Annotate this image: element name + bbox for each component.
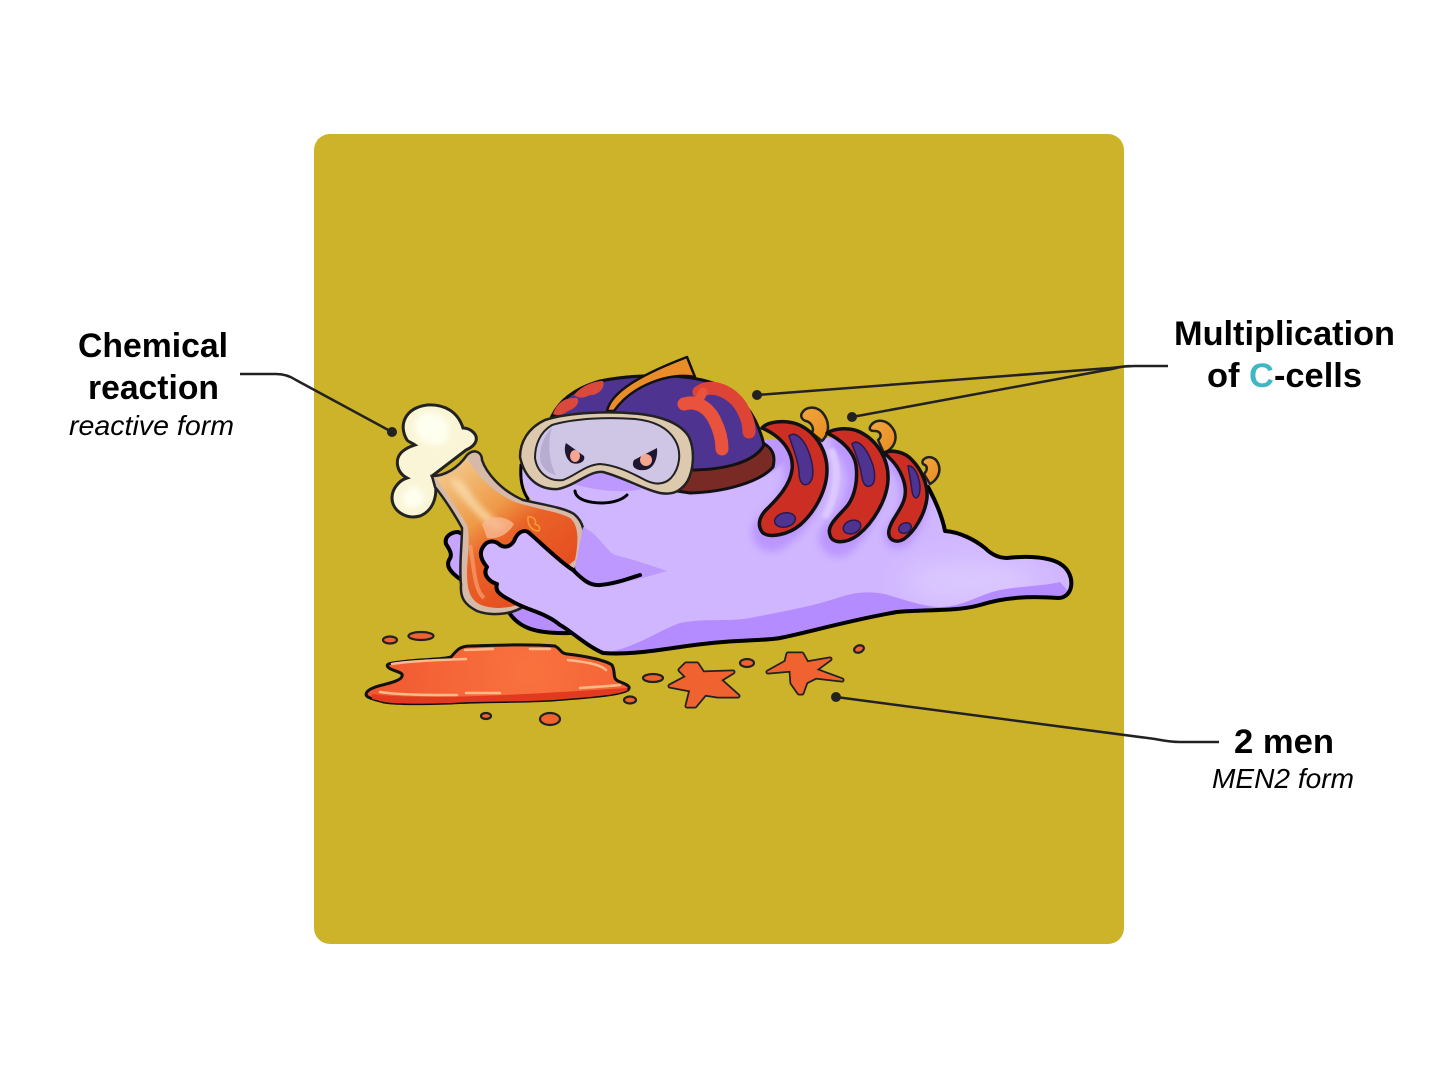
leader: 2 men: [831, 692, 1219, 742]
body shading bands: [574, 473, 1068, 652]
illustration: cell character with flask: [366, 357, 1080, 725]
label: 2 men: [1212, 723, 1354, 794]
diving helmet: [552, 357, 774, 493]
label: chemical reaction: [69, 327, 234, 441]
cell body fill: [522, 430, 1071, 654]
helmet fin: [607, 357, 695, 411]
foam: [392, 405, 476, 517]
orange hooks: [801, 408, 939, 484]
helmet brim: [670, 443, 774, 493]
label: chemical reaction: Chemical: [78, 327, 228, 365]
left eye: [565, 443, 584, 464]
red tentacle 2: [827, 429, 888, 542]
leader: chemical reaction: [240, 374, 397, 437]
tentacles: [759, 408, 939, 542]
front arm and hand: [481, 531, 680, 653]
label: 2 men: 2 men: [1234, 723, 1334, 761]
label: multiplication of C-cells: of C-cells: [1207, 357, 1362, 395]
splatter star right: [768, 654, 842, 693]
red tentacle 3: [884, 451, 927, 541]
spilled puddle: [366, 645, 630, 706]
label: multiplication of C-cells: Multiplication: [1174, 315, 1395, 353]
infographic canvas: [70, 134, 1393, 944]
chin outline and mouth: [521, 465, 627, 503]
body and arm outline: [481, 487, 1071, 654]
background panel: [314, 134, 1124, 944]
label: 2 men: MEN2 form: [1212, 763, 1354, 794]
label: chemical reaction: reactive form: [69, 410, 234, 441]
label: multiplication of C-cells: [1174, 315, 1395, 395]
helmet brain squiggles: [684, 388, 749, 449]
leader: multiplication of C-cells: [752, 366, 1168, 422]
goggles: [520, 412, 693, 494]
label: chemical reaction: reaction: [88, 369, 219, 407]
red tentacle 1: [759, 422, 827, 535]
helmet dome: [552, 376, 764, 470]
right eye: [633, 448, 657, 470]
back arm under body: [505, 590, 600, 633]
back hand behind flask: [446, 532, 475, 580]
splatter star left: [670, 664, 738, 706]
splatter drops: [383, 632, 865, 725]
flask: [432, 451, 584, 614]
